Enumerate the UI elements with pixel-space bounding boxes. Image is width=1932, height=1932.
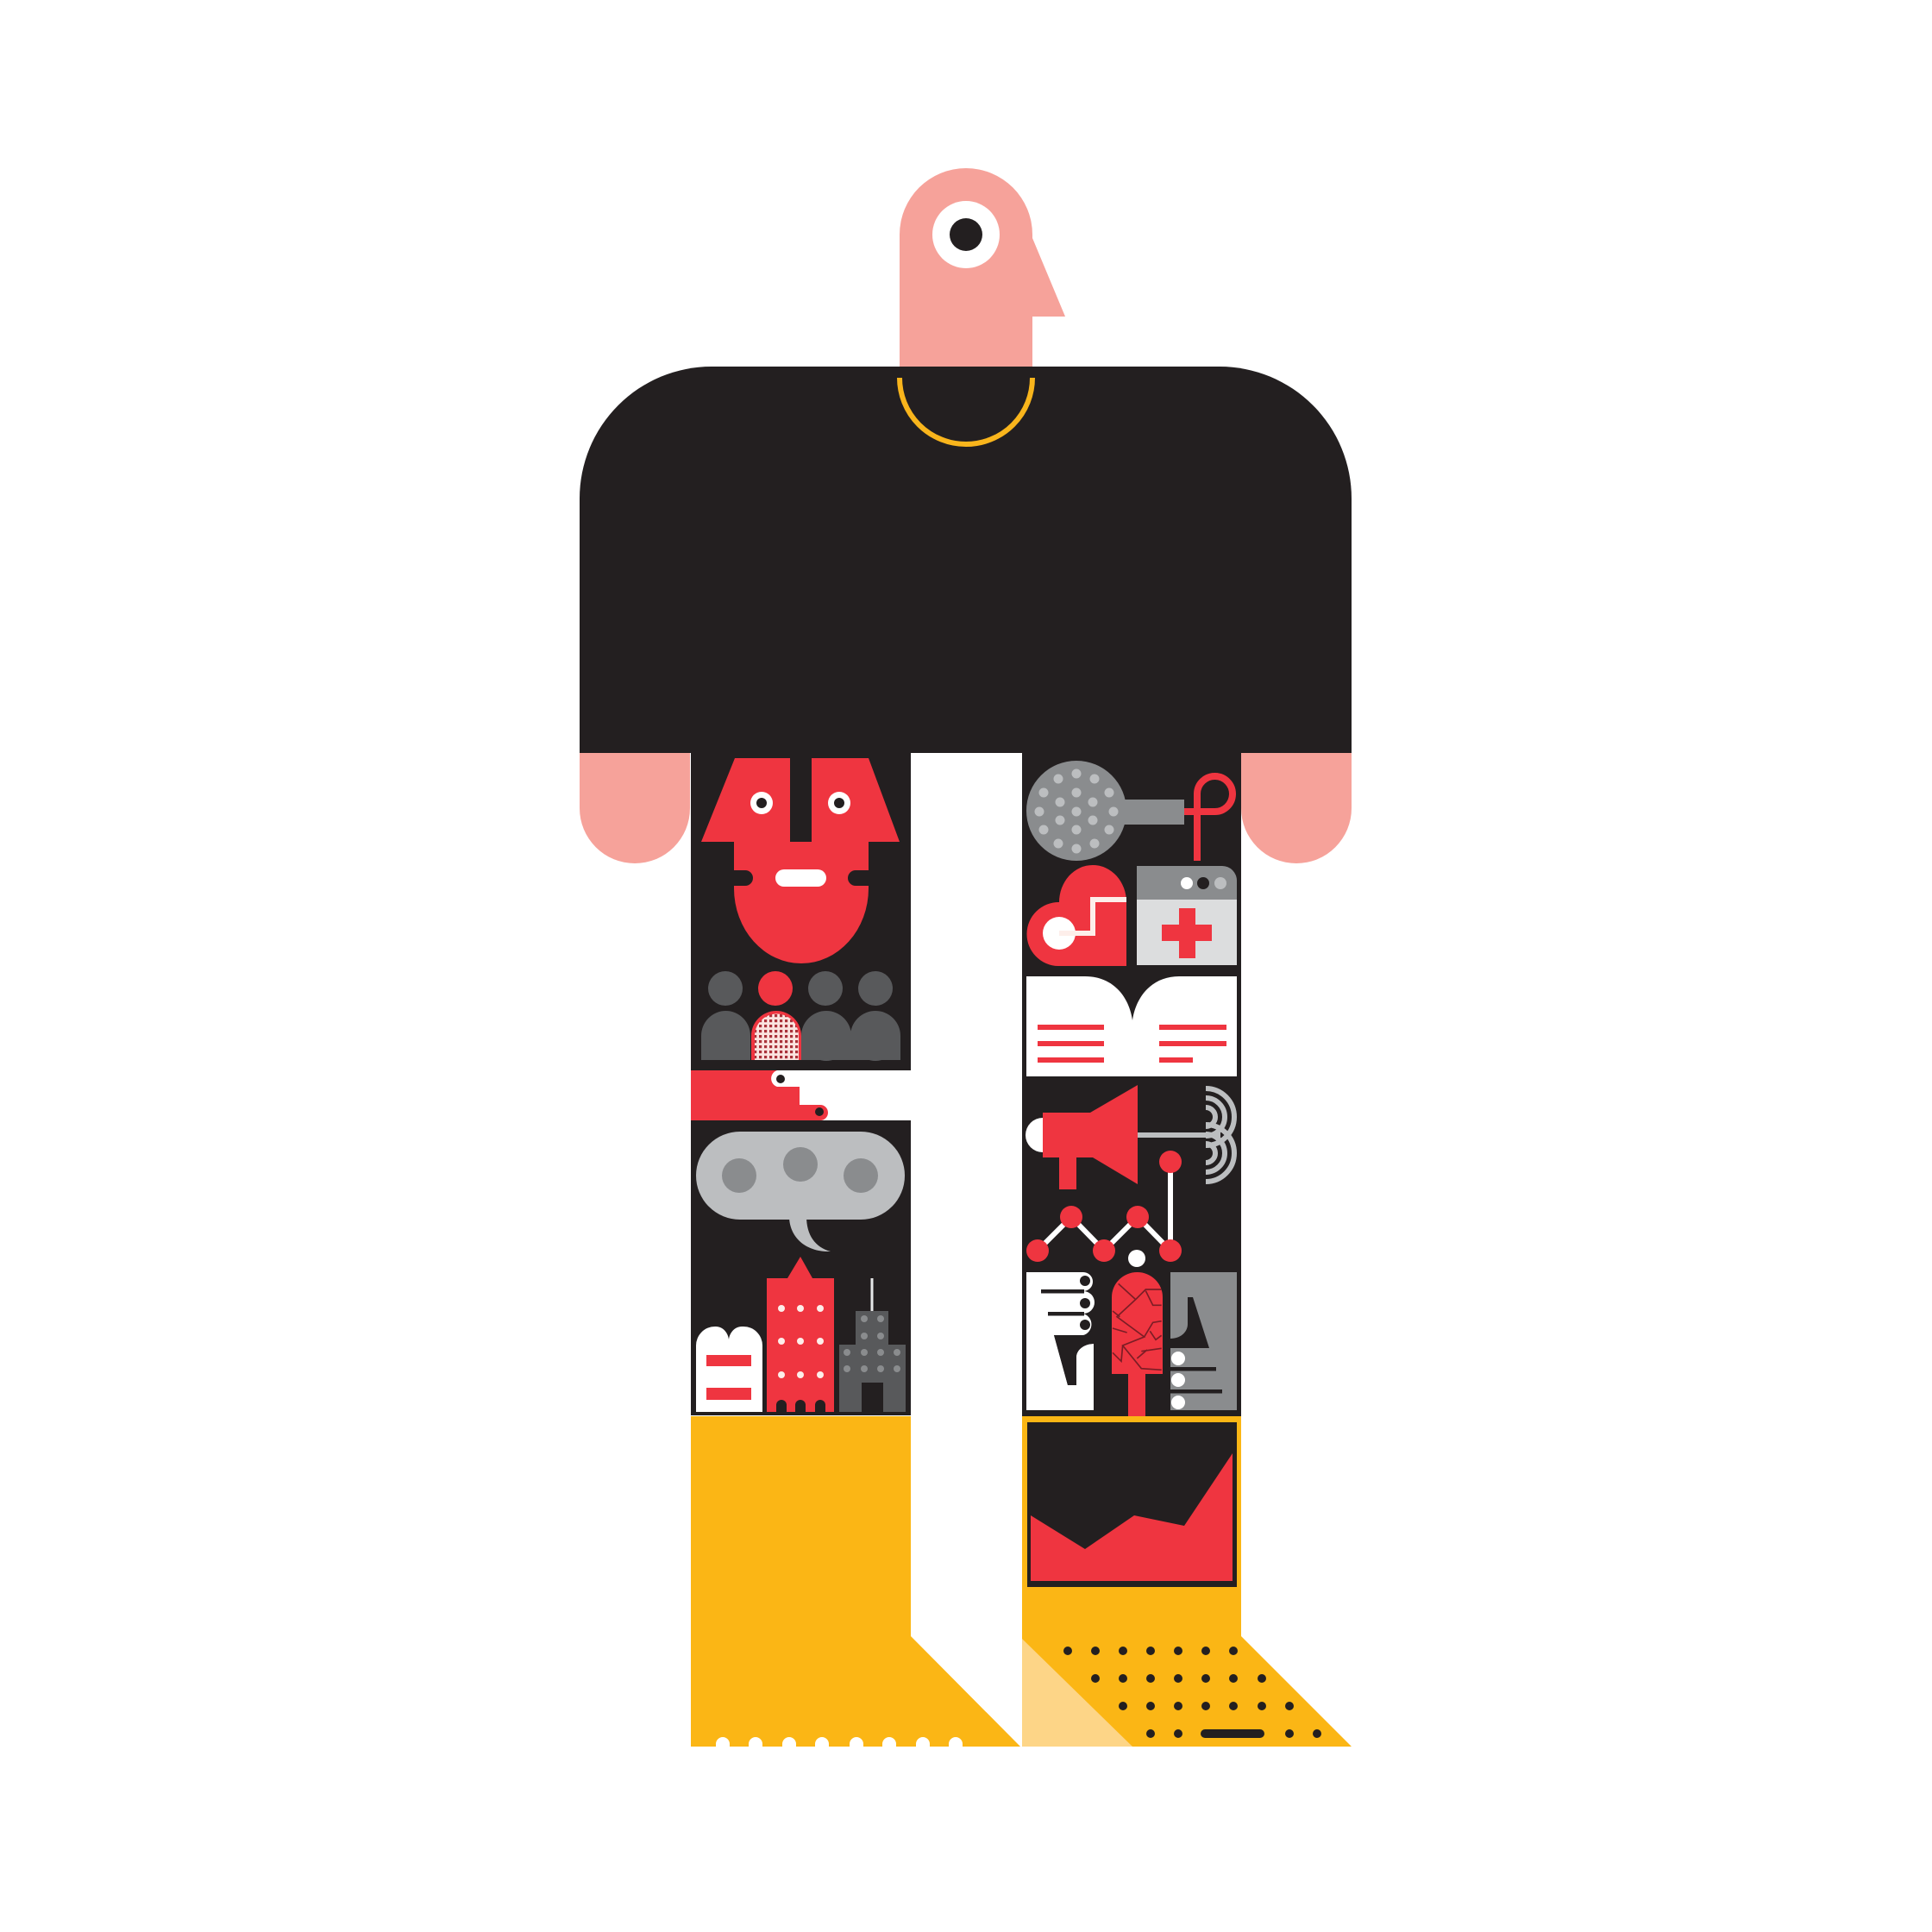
icon: cracked red tree — [1112, 1272, 1163, 1416]
icon: eye — [932, 201, 1000, 268]
icon: white hand — [1026, 1272, 1095, 1410]
icon: grey hand — [1170, 1272, 1237, 1410]
icon: group of people — [701, 971, 900, 1061]
left boot — [691, 1416, 1020, 1747]
icon: white building — [696, 1327, 762, 1412]
necklace — [900, 378, 1032, 444]
icon: open book — [1026, 976, 1237, 1076]
figure: head — [900, 168, 1065, 367]
icon: grey tower — [839, 1278, 906, 1412]
icon: red building — [767, 1257, 834, 1412]
icon: medical window — [1137, 866, 1237, 965]
panel: left leg icons — [691, 753, 911, 1415]
figure: black torso — [580, 367, 1352, 753]
icon: pointing hand band — [691, 1070, 911, 1120]
boot dots — [1063, 1647, 1321, 1738]
boot sole scallops — [716, 1737, 963, 1747]
icon: red face — [701, 758, 900, 963]
icon: network chain — [1026, 1151, 1182, 1267]
icon: stethoscope head and handle — [1026, 761, 1233, 861]
panel: right leg icons — [1022, 753, 1241, 1416]
icon: megaphone with signal — [1026, 1085, 1234, 1189]
figure: arms and hands — [580, 742, 1352, 863]
area chart — [1027, 1422, 1237, 1587]
icon: speech bubble — [696, 1132, 905, 1251]
right boot — [1022, 1416, 1352, 1747]
boot heel highlight — [1022, 1639, 1132, 1747]
icon: heart with pulse line — [1026, 865, 1126, 966]
